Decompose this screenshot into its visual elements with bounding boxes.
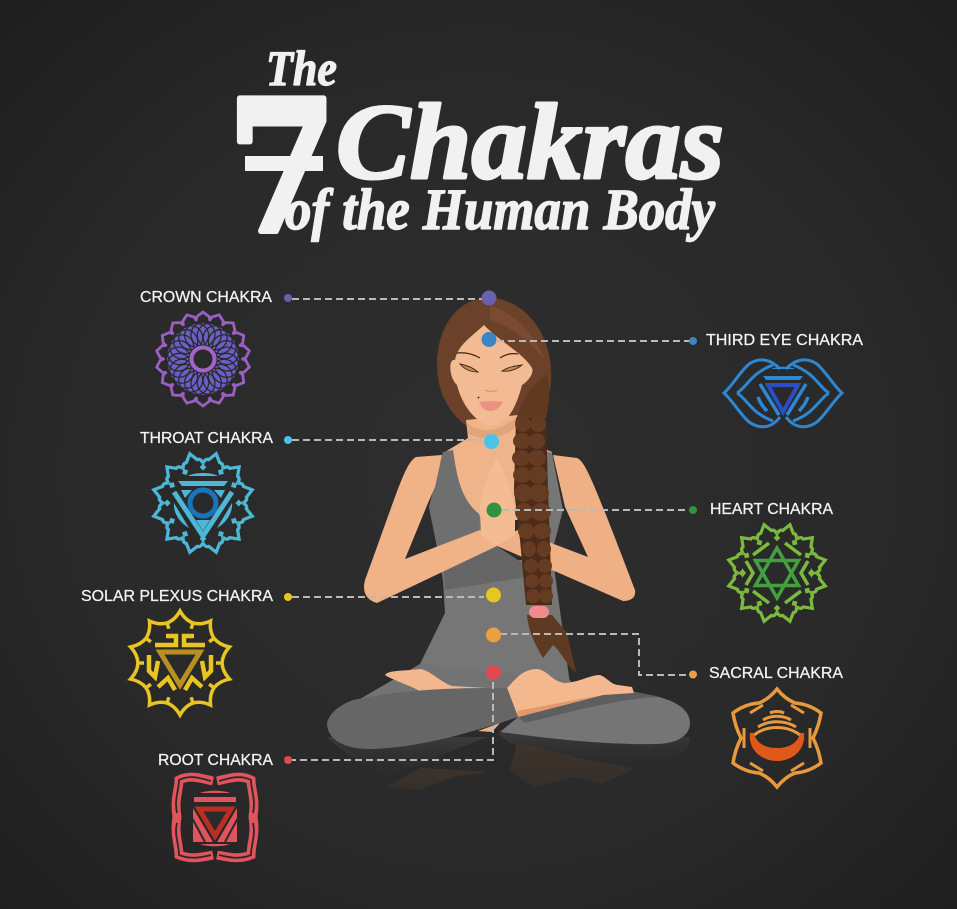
braid [512,375,576,672]
marker: root [284,665,501,764]
face [450,325,533,426]
connector lines [292,299,690,760]
marker: third eye [482,332,697,347]
marker: crown [284,290,496,306]
marker: heart [486,502,697,518]
hair back [437,298,551,430]
title line: of the Human Body: of the Human Body [285,177,715,242]
label: crown chakra: CROWN CHAKRA [140,289,272,306]
top garment [420,450,570,684]
brows [457,353,518,358]
hair tie [529,606,549,618]
icon: throat chakra [150,450,256,556]
neck and chest [445,415,552,520]
title word: Chakras: Chakras [336,83,724,202]
foot sole shadow [517,695,603,717]
marker: solar plexus [284,588,501,602]
label: sacral chakra: SACRAL CHAKRA [709,665,843,682]
hair highlight [490,306,545,360]
marker: throat [284,434,499,449]
label: solar plexus chakra: SOLAR PLEXUS CHAKRA [81,588,273,605]
icon: root chakra [176,777,254,858]
left foot [385,669,487,693]
label: heart chakra: HEART CHAKRA [710,501,833,518]
lower torso and thigh [353,664,575,703]
meditating woman figure [327,298,690,790]
icon: heart chakra [725,521,829,625]
crossed leg [327,688,518,749]
label: third eye chakra: THIRD EYE CHAKRA [706,332,863,349]
petals [176,777,254,858]
icon: crown chakra [155,312,251,406]
title [227,40,724,274]
icon: sacral chakra [733,689,821,787]
right foot [507,669,634,717]
leg shadow [518,692,660,723]
lips [479,401,503,411]
label: throat chakra: THROAT CHAKRA [140,430,273,447]
nose [485,390,497,392]
icon: solar plexus chakra [127,611,233,715]
label: root chakra: ROOT CHAKRA [158,752,273,769]
head [450,306,545,426]
marker: sacral [486,628,697,678]
floor reflection [327,733,690,790]
icon: third eye chakra [724,360,842,427]
mole [478,397,479,398]
title word: The: The [266,40,337,96]
left arm [364,455,497,603]
chin shadow [467,416,518,438]
title numeral: 7: 7 [227,60,337,274]
right arm [497,455,635,601]
praying hands [480,458,515,546]
ankle [478,723,500,732]
right leg [500,690,690,744]
closed eyes [460,364,522,372]
